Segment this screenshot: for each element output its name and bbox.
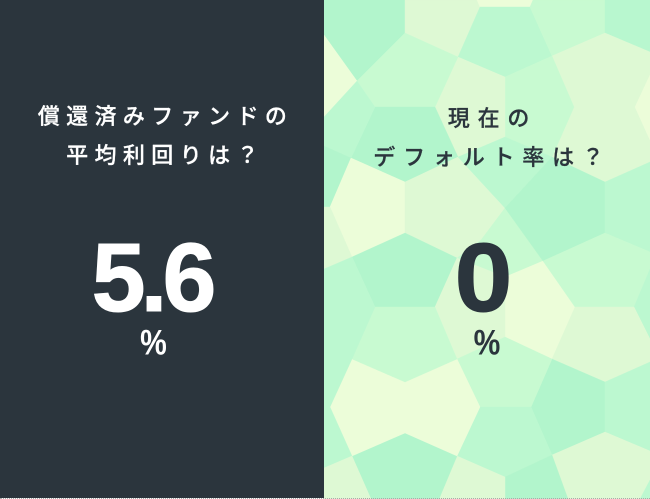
heading: average yield question: 平均利回りは？ [66, 142, 265, 168]
unit: percent: % [474, 324, 500, 363]
heading: default rate question: デフォルト率は？ [373, 144, 612, 170]
number: 0: 0 [455, 223, 507, 332]
heading: average yield question [38, 104, 293, 168]
number: 5.6: 5.6 [92, 223, 211, 332]
heading: default rate question: 現在の [448, 106, 537, 131]
panel: default rate [373, 106, 612, 363]
heading: default rate question [373, 106, 612, 170]
heading: average yield question: 償還済みファンドの [38, 104, 293, 129]
unit: percent: % [140, 324, 167, 363]
panel: average yield [0, 0, 324, 498]
